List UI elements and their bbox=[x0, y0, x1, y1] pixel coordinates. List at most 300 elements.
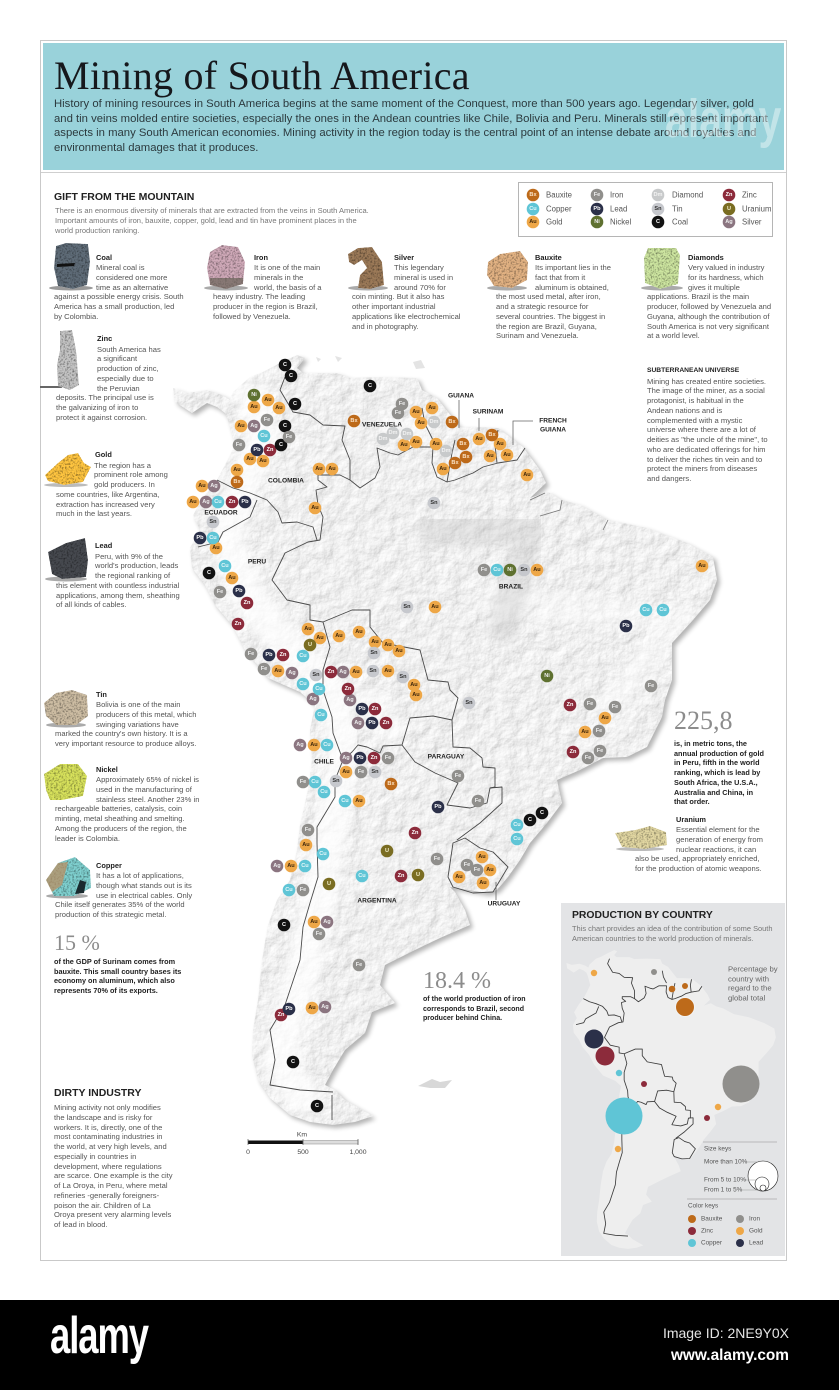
zinc markers: Zn bbox=[235, 621, 242, 627]
text: silver: applications like electrochemical bbox=[352, 312, 460, 321]
gold markers: Au bbox=[410, 682, 418, 688]
text: uranium: generation of energy from bbox=[676, 835, 763, 844]
text: coal: against a possible energy crisis. South bbox=[54, 292, 184, 301]
text: iron: It is one of the main bbox=[254, 263, 320, 272]
text: nickel: leader is Colombia. bbox=[55, 834, 120, 843]
stat text: iron bbox=[423, 996, 526, 1022]
text: uranium: also be used, appropriately enriched, bbox=[635, 854, 760, 863]
size and color keys: global total bbox=[728, 994, 765, 1002]
text: copper: though what stands out is its bbox=[96, 881, 192, 890]
text: subterranean universe: and dangers. bbox=[647, 474, 691, 483]
text: coal: considered one more bbox=[96, 273, 167, 282]
text: copper bbox=[55, 861, 192, 919]
gold markers: Au bbox=[259, 458, 267, 464]
text: subterranean universe: protect the miners from diseases bbox=[647, 464, 757, 473]
text: silver: other important industrial bbox=[352, 302, 436, 311]
legend box: C bbox=[656, 219, 660, 225]
text: dirty industry: especially in countries in bbox=[54, 1152, 136, 1161]
icon: tin rock bbox=[44, 690, 88, 728]
gold markers: Au bbox=[455, 874, 463, 880]
country labels: SURINAM bbox=[473, 408, 504, 416]
text: dirty industry: Oroya present very alarming levels bbox=[54, 1210, 171, 1219]
coal markers: C bbox=[315, 1103, 319, 1109]
website: www.alamy.com bbox=[671, 1347, 789, 1364]
gold markers: Au bbox=[371, 639, 379, 645]
bauxite markers: Bx bbox=[350, 418, 358, 424]
text: tin: Tin bbox=[96, 690, 107, 699]
zinc markers: Zn bbox=[267, 447, 274, 453]
gift intro text: There is an enormous diversity of minerals that are extracted from the veins in South America. bbox=[55, 206, 369, 215]
legend box: Coal bbox=[672, 218, 688, 226]
gold markers: Au bbox=[523, 472, 531, 478]
zinc markers: Zn bbox=[567, 702, 574, 708]
nickel markers: Ni bbox=[251, 392, 257, 398]
tin markers: Sn bbox=[312, 672, 320, 678]
legend box: U bbox=[727, 206, 731, 212]
text: iron: Iron bbox=[254, 253, 268, 262]
text: tin: swinging variations have bbox=[96, 720, 179, 729]
stat text: surinam: economy on aluminum, which also bbox=[54, 976, 175, 985]
gold markers: Au bbox=[264, 397, 272, 403]
text: gold: The region has a bbox=[94, 460, 151, 470]
gold markers: Au bbox=[342, 769, 350, 775]
intro text bbox=[54, 98, 768, 154]
legend box: Gold bbox=[546, 218, 562, 226]
stat text: gold in Peru: annual production of gold bbox=[674, 749, 764, 758]
text: diamonds: gives it multiple bbox=[688, 283, 740, 292]
legend box: Sn bbox=[654, 206, 662, 212]
gold markers: Au bbox=[310, 919, 318, 925]
gold markers: Au bbox=[308, 1005, 316, 1011]
text: nickel: Among the producers of the region, the bbox=[55, 824, 187, 833]
text: nickel: stainless steel. Another 23% in bbox=[96, 795, 199, 804]
gift intro text: world production ranking. bbox=[55, 226, 139, 234]
iron markers: Fe bbox=[399, 401, 405, 407]
gold markers: Au bbox=[304, 626, 312, 632]
coal markers: C bbox=[291, 1059, 295, 1065]
stat text: surinam: bauxite. This small country bases its bbox=[54, 967, 181, 976]
legend box: Ni bbox=[594, 219, 600, 225]
size and color keys: Gold bbox=[749, 1228, 763, 1234]
lead markers: Pb bbox=[235, 588, 243, 594]
coal markers: C bbox=[279, 442, 283, 448]
country labels: PERU bbox=[248, 558, 266, 566]
silver markers: Ag bbox=[321, 1004, 329, 1010]
lead markers: Pb bbox=[253, 447, 261, 453]
country labels: BRAZIL bbox=[499, 584, 523, 590]
diamond markers bbox=[377, 416, 452, 457]
production intro text bbox=[572, 924, 773, 943]
tin markers: Sn bbox=[332, 778, 340, 784]
leader lines bbox=[459, 400, 533, 900]
lead markers: Pb bbox=[285, 1006, 293, 1012]
silver markers: Ag bbox=[210, 483, 218, 489]
text: tin: very important resource to produce alloys. bbox=[55, 739, 196, 748]
text: zinc: Zinc bbox=[97, 334, 112, 343]
silver markers: Ag bbox=[309, 696, 317, 702]
copper markers: Cu bbox=[341, 798, 349, 804]
gold markers: Au bbox=[233, 467, 241, 473]
text: silver: around 70% for bbox=[394, 283, 446, 292]
lead markers: Pb bbox=[196, 535, 204, 541]
text: nickel: Nickel bbox=[96, 765, 118, 774]
diamond markers: Dm bbox=[429, 419, 439, 425]
legend box: Au bbox=[529, 219, 537, 225]
legend box bbox=[518, 182, 772, 236]
icon: iron rock bbox=[204, 245, 248, 290]
country borders bbox=[198, 377, 525, 1120]
text: uranium bbox=[635, 815, 763, 873]
gold markers: Au bbox=[581, 729, 589, 735]
copper markers: Cu bbox=[358, 873, 366, 879]
text: gold: extraction has increased very bbox=[56, 500, 155, 508]
iron markers: Fe bbox=[248, 651, 254, 657]
iron markers: Fe bbox=[587, 701, 593, 707]
text: coal bbox=[54, 253, 184, 321]
size and color keys: regard to the bbox=[728, 984, 772, 992]
stat text: surinam bbox=[54, 957, 181, 995]
stat text: gold in Peru: South Africa, the U.S.A., bbox=[674, 778, 758, 787]
legend box: Ag bbox=[725, 219, 733, 225]
text: silver: coin minting. But it also has bbox=[352, 292, 444, 301]
lead markers: Pb bbox=[356, 755, 364, 761]
text: lead: world's production, leads bbox=[95, 561, 178, 570]
copper markers: Cu bbox=[221, 563, 229, 569]
text: iron: minerals in the bbox=[254, 273, 303, 282]
icon: diamond bbox=[641, 248, 683, 290]
intro text: environmental damages that it produces. bbox=[54, 142, 258, 154]
bauxite markers: Bx bbox=[488, 432, 496, 438]
text: iron: world, the basis of a bbox=[254, 283, 322, 292]
footer bar bbox=[0, 1300, 839, 1390]
text: lead: Peru, with 9% of the bbox=[95, 552, 163, 560]
gold markers: Au bbox=[395, 648, 403, 654]
text: nickel: Approximately 65% of nickel is bbox=[96, 775, 199, 784]
icon: nickel rock bbox=[44, 764, 87, 800]
iron markers: Fe bbox=[455, 773, 461, 779]
icon: lead rock bbox=[45, 538, 88, 582]
copper markers: Cu bbox=[299, 653, 307, 659]
text: diamonds: for its hardness, which bbox=[688, 273, 764, 282]
text: zinc: protect it against corrosion. bbox=[56, 413, 147, 422]
chart: inset bubble map bbox=[566, 950, 778, 1248]
size and color keys: country with bbox=[728, 974, 769, 984]
stat text: surinam: of the GDP of Surinam comes from bbox=[54, 957, 175, 966]
text: gold bbox=[56, 450, 168, 518]
heading: production by country: PRODUCTION BY COUNTRY bbox=[572, 910, 713, 921]
legend box: Nickel bbox=[610, 218, 631, 226]
text: silver: and in photography. bbox=[352, 322, 419, 331]
tin markers: Sn bbox=[520, 567, 528, 573]
text: tin: Bolivia is one of the main bbox=[96, 700, 180, 709]
tin markers: Sn bbox=[209, 519, 217, 525]
text: uranium: Uranium bbox=[676, 815, 706, 824]
islands bbox=[418, 1079, 452, 1088]
text: bauxite: fact that from it bbox=[535, 273, 585, 282]
text: dirty industry: poison the air. Children of La bbox=[54, 1200, 151, 1210]
lead markers: Pb bbox=[622, 623, 630, 629]
copper markers: Cu bbox=[301, 863, 309, 869]
country labels bbox=[204, 392, 567, 908]
zinc markers: Zn bbox=[244, 600, 251, 606]
country labels: CHILE bbox=[314, 758, 334, 766]
text: dirty industry: the world, at very high levels, and bbox=[54, 1142, 167, 1151]
legend box: Uranium bbox=[742, 204, 771, 214]
iron markers: Fe bbox=[264, 417, 270, 423]
text: lead bbox=[56, 541, 180, 609]
silver markers: Ag bbox=[323, 919, 331, 925]
iron markers: Fe bbox=[597, 748, 603, 754]
silver markers: Ag bbox=[202, 499, 210, 505]
text: subterranean universe: Andean nations and is bbox=[647, 406, 722, 415]
diamond markers: Dm bbox=[388, 430, 398, 436]
text: zinc: production of zinc, bbox=[97, 364, 159, 373]
gold markers: Au bbox=[310, 742, 318, 748]
text: dirty industry: of lead in blood. bbox=[54, 1220, 108, 1229]
gold markers: Au bbox=[384, 642, 392, 648]
intro text: History of mining resources in South America begins at the same moment of the Conquest, more than 500 years ago. Legendary silver, gold bbox=[54, 98, 754, 110]
tin markers: Sn bbox=[371, 769, 379, 775]
text: iron: producer in the region is Brazil, bbox=[213, 302, 318, 311]
text: diamonds: at a world level. bbox=[647, 331, 700, 340]
text: gold: prominent role among bbox=[94, 470, 168, 479]
lead markers: Pb bbox=[265, 652, 273, 658]
coal markers: C bbox=[293, 401, 297, 407]
text: silver bbox=[352, 253, 460, 331]
country labels: ECUADOR bbox=[204, 510, 238, 516]
gold markers: Au bbox=[315, 466, 323, 472]
copper markers: Cu bbox=[513, 822, 521, 828]
text: bauxite: the most used metal, after iron, bbox=[496, 292, 601, 301]
text: bauxite: and a strategic resource for bbox=[496, 302, 588, 311]
country labels: GUIANA bbox=[540, 426, 566, 434]
text: lead: of all kinds of cables. bbox=[56, 600, 126, 609]
country labels: GUIANA bbox=[448, 392, 474, 400]
gold markers: Au bbox=[287, 863, 295, 869]
coal markers bbox=[203, 359, 548, 1112]
image id: Image ID: 2NE9Y0X bbox=[663, 1325, 789, 1341]
gold markers: Au bbox=[246, 456, 254, 462]
heading: gift from the mountain: GIFT FROM THE MOUNTAIN bbox=[54, 191, 194, 203]
text: dirty industry: most contaminating industries in bbox=[54, 1132, 162, 1141]
gold markers: Au bbox=[228, 575, 236, 581]
size and color keys: Bauxite bbox=[701, 1216, 723, 1222]
zinc markers: Zn bbox=[345, 686, 352, 692]
copper markers bbox=[207, 430, 669, 896]
iron markers: Fe bbox=[217, 589, 223, 595]
zinc markers: Zn bbox=[229, 499, 236, 505]
text: bauxite: the region are Brazil, Guyana, bbox=[496, 322, 597, 331]
stat text: iron: corresponds to Brazil, second bbox=[423, 1006, 524, 1013]
text: subterranean universe: complemented with a mystic bbox=[647, 416, 742, 424]
text: zinc: a significant bbox=[97, 354, 137, 363]
country labels: ARGENTINA bbox=[357, 898, 397, 904]
zinc markers: Zn bbox=[570, 749, 577, 755]
iron markers: Fe bbox=[464, 862, 470, 868]
legend box: Bauxite bbox=[546, 190, 572, 200]
scale bar: 1,000 bbox=[349, 1149, 367, 1156]
iron markers: Fe bbox=[300, 779, 306, 785]
silver markers: Ag bbox=[346, 697, 354, 703]
copper markers: Cu bbox=[311, 779, 319, 785]
iron markers: Fe bbox=[596, 728, 602, 734]
iron markers bbox=[214, 398, 657, 971]
coal markers: C bbox=[368, 383, 372, 389]
text: nickel: minting, metal sheathing and smelting. bbox=[55, 814, 185, 823]
tin markers: Sn bbox=[403, 604, 411, 610]
text: iron bbox=[213, 253, 322, 321]
iron markers: Fe bbox=[286, 434, 292, 440]
nickel markers: Ni bbox=[507, 567, 513, 573]
gold markers: Au bbox=[475, 436, 483, 442]
text: diamonds: producer, followed by Venezuela and bbox=[647, 302, 771, 311]
intro text: and tin veins molded entire societies, especially the ones in the Andean countries like Chile, Bolivia and Peru. Minerals still represent important bbox=[54, 113, 768, 125]
coal markers: C bbox=[289, 373, 293, 379]
gold markers: Au bbox=[439, 466, 447, 472]
text: bauxite bbox=[496, 253, 611, 340]
iron markers: Fe bbox=[316, 931, 322, 937]
gold markers: Au bbox=[250, 404, 258, 410]
stat text: gold in Peru: is, in metric tons, the bbox=[674, 739, 747, 748]
gold markers: Au bbox=[479, 880, 487, 886]
gold markers: Au bbox=[384, 668, 392, 674]
text: lead: the regional ranking of bbox=[95, 571, 170, 580]
gold markers: Au bbox=[428, 405, 436, 411]
scale bar bbox=[246, 1132, 367, 1156]
bauxite markers bbox=[231, 415, 498, 790]
legend box: Copper bbox=[546, 204, 572, 214]
gold markers bbox=[187, 394, 708, 1014]
text: dirty industry: of La Oroya, in Peru, where metal bbox=[54, 1181, 168, 1190]
copper markers: Cu bbox=[315, 686, 323, 692]
iron markers: Fe bbox=[385, 755, 391, 761]
copper markers: Cu bbox=[513, 836, 521, 842]
zinc markers: Zn bbox=[280, 652, 287, 658]
gold markers: Au bbox=[432, 441, 440, 447]
text: copper: Chile itself generates 35% of the world bbox=[55, 900, 185, 909]
silver markers: Ag bbox=[296, 742, 304, 748]
iron markers: Fe bbox=[395, 410, 401, 416]
copper markers: Cu bbox=[285, 887, 293, 893]
text: gold: much in the last years. bbox=[56, 509, 132, 518]
icon: copper rock bbox=[46, 857, 91, 898]
text: bauxite: Its important lies in the bbox=[535, 263, 611, 272]
tin markers: Sn bbox=[369, 668, 377, 674]
gold markers: Au bbox=[237, 423, 245, 429]
tin markers bbox=[207, 497, 530, 787]
gold markers: Au bbox=[311, 505, 319, 511]
size and color keys: Lead bbox=[749, 1240, 764, 1246]
production intro text: This chart provides an idea of the contribution of some South bbox=[572, 924, 773, 933]
tin markers: Sn bbox=[430, 500, 438, 506]
text: gold: Gold bbox=[95, 450, 112, 459]
stat text: gold in Peru bbox=[674, 739, 764, 806]
heading: dirty industry: DIRTY INDUSTRY bbox=[54, 1087, 142, 1099]
legend box: Pb bbox=[593, 206, 601, 212]
text: dirty industry: are scarce. One example is the city bbox=[54, 1171, 173, 1180]
text: copper: Copper bbox=[96, 861, 122, 870]
page frame bbox=[40, 40, 787, 1261]
text: tin: producers of this metal, which bbox=[96, 710, 196, 719]
text: subterranean universe: Mining has created entire societies. bbox=[647, 376, 766, 386]
text: uranium: nuclear reactions, it can bbox=[676, 845, 756, 854]
gold markers: Au bbox=[412, 692, 420, 698]
text: copper: It has a lot of applications, bbox=[96, 871, 184, 880]
text: bauxite: several countries. The biggest in bbox=[496, 312, 605, 321]
size and color keys bbox=[687, 964, 778, 1247]
text: iron: heavy industry. The leading bbox=[213, 292, 305, 301]
size and color keys: More than 10% bbox=[704, 1158, 748, 1166]
icon: coal rock bbox=[49, 243, 93, 290]
iron markers: Fe bbox=[648, 683, 654, 689]
stat text: surinam: represents 70% of its exports. bbox=[54, 986, 158, 995]
gold markers: Au bbox=[478, 854, 486, 860]
gold markers: Au bbox=[328, 466, 336, 472]
legend box: Iron bbox=[610, 190, 623, 200]
text: bauxite: aluminum is obtained, bbox=[535, 283, 609, 292]
icon: gold nugget bbox=[44, 453, 91, 487]
gold markers: Au bbox=[503, 452, 511, 458]
lead markers: Pb bbox=[358, 706, 366, 712]
text: zinc: South America has bbox=[97, 344, 161, 354]
stat: 15 percent: 15 % bbox=[54, 930, 100, 955]
copper markers: Cu bbox=[299, 681, 307, 687]
bauxite markers: Bx bbox=[448, 419, 456, 425]
text: lead: Lead bbox=[95, 541, 112, 550]
size and color keys: From 1 to 5% bbox=[704, 1186, 743, 1194]
copper markers: Cu bbox=[209, 535, 217, 541]
icon: zinc rock bbox=[40, 330, 79, 390]
divider bbox=[41, 172, 786, 173]
text: diamonds: South America is not very significant bbox=[647, 322, 769, 331]
panel: production by country bbox=[561, 903, 785, 1256]
lead markers: Pb bbox=[434, 804, 442, 810]
stat text: gold in Peru: ranking, which is lead by bbox=[674, 768, 760, 777]
nickel markers: Ni bbox=[544, 673, 550, 679]
coal markers: C bbox=[540, 810, 544, 816]
text: coal: Mineral coal is bbox=[96, 263, 145, 272]
gold markers: Au bbox=[355, 798, 363, 804]
copper markers: Cu bbox=[214, 499, 222, 505]
title: Mining of South America bbox=[54, 53, 470, 98]
text: lead: applications, among them, sheathing bbox=[56, 590, 180, 600]
zinc markers: Zn bbox=[398, 873, 405, 879]
iron markers: Fe bbox=[481, 567, 487, 573]
production bubbles bbox=[584, 969, 760, 1152]
inset landmass bbox=[566, 950, 776, 1249]
silver markers: Ag bbox=[250, 423, 258, 429]
iron markers: Fe bbox=[585, 755, 591, 761]
size and color keys: From 5 to 10% bbox=[704, 1176, 746, 1184]
watermark: alamy bbox=[665, 89, 781, 149]
uranium markers: U bbox=[416, 872, 420, 878]
coal markers: C bbox=[282, 922, 286, 928]
text: dirty industry: refineries -generally foreigners- bbox=[54, 1191, 159, 1200]
size and color keys: Iron bbox=[749, 1216, 760, 1222]
legend box: Dm bbox=[653, 192, 663, 198]
iron markers: Fe bbox=[434, 856, 440, 862]
size and color keys: Zinc bbox=[701, 1228, 714, 1234]
text: silver: Silver bbox=[394, 253, 414, 262]
country labels: URUGUAY bbox=[488, 900, 521, 908]
icon: silver rock bbox=[348, 247, 388, 290]
text: gold: gold producers. In bbox=[94, 480, 155, 489]
text: coal: Coal bbox=[96, 253, 112, 262]
text: dirty industry: development, where regulations bbox=[54, 1162, 162, 1170]
legend box: Bx bbox=[529, 192, 537, 198]
diamond markers: Dm bbox=[402, 431, 412, 437]
main map bbox=[40, 182, 773, 1155]
